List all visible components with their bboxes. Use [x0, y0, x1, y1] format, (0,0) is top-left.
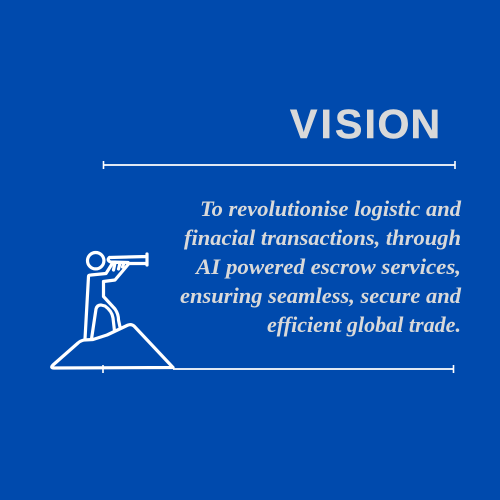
vision statement text: ensuring seamless, secure and — [180, 283, 462, 308]
vision statement text — [180, 196, 462, 337]
vision statement text: finacial transactions, through — [184, 225, 461, 250]
icon part: mountain — [52, 325, 173, 368]
vision statement text: efficient global trade. — [267, 312, 461, 337]
bottom rule with end ticks — [103, 365, 454, 373]
icon: person with telescope on a mountain — [52, 253, 173, 368]
top rule with end ticks — [104, 161, 455, 169]
icon part: telescope — [108, 254, 147, 270]
icon part: body and arms — [85, 264, 128, 339]
vision statement text: To revolutionise logistic and — [200, 196, 462, 221]
title: VISION: VISION — [290, 101, 440, 147]
icon part: head — [88, 253, 104, 269]
vision statement text: AI powered escrow services, — [194, 254, 461, 279]
